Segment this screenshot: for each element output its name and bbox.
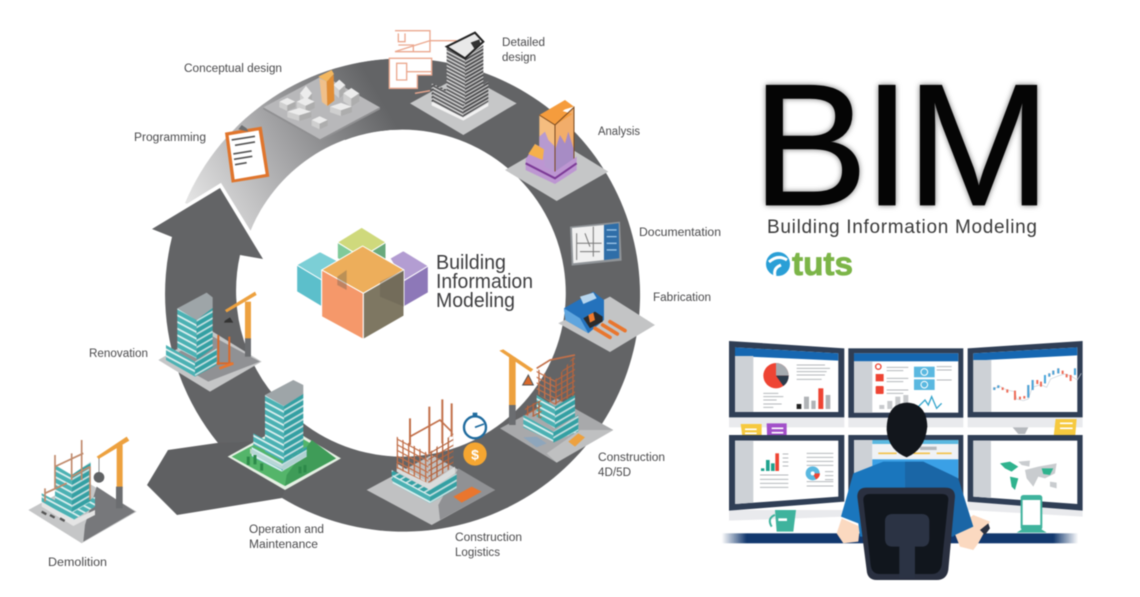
cube: teal: [297, 252, 345, 307]
ring: dark main arc: [282, 59, 640, 532]
monitor stand and sticky notes: [741, 419, 1077, 444]
logo: tuts: [766, 245, 853, 282]
monitor: world map: [968, 435, 1083, 517]
chair: [857, 488, 955, 580]
cube: green: [337, 227, 386, 273]
central logo text: Modeling: [436, 290, 515, 312]
icon: stopwatch: [464, 413, 486, 438]
icon: phone: [1017, 495, 1047, 533]
step labels: Renovation: [89, 348, 148, 360]
step: demolition: [28, 437, 137, 543]
process ring with arrows: [147, 58, 640, 532]
subtitle: Building Information Modeling: [767, 217, 1037, 238]
person: arms: [837, 515, 990, 550]
monitor: centre web page: [848, 435, 963, 502]
monitor: security dashboard: [848, 348, 963, 427]
step labels: [48, 37, 721, 569]
step labels: Fabrication: [653, 292, 711, 304]
title: BIM: BIM: [752, 47, 1051, 242]
icon: mouse: [980, 523, 990, 535]
central logo text: Building: [436, 252, 506, 274]
arrow: demolition branch: [147, 440, 300, 515]
step labels: 4D/5D: [598, 467, 631, 479]
step: construction 4D/5D: [499, 349, 613, 463]
step: conceptual design platform: [263, 70, 380, 141]
desk: [722, 533, 1078, 543]
step: analysis tower: [505, 100, 608, 201]
step labels: Conceptual design: [184, 63, 282, 75]
step labels: Detailed: [502, 37, 545, 49]
step labels: Operation and: [249, 524, 324, 536]
step labels: Logistics: [455, 547, 500, 559]
monitor: bar and donut report: [729, 435, 844, 521]
arrow: upward head into programming: [152, 188, 290, 498]
central logo: coloured cubes: [297, 227, 428, 339]
step labels: Demolition: [48, 557, 107, 569]
logo: tuts: tuts: [792, 245, 853, 282]
step: fabrication: [558, 292, 655, 352]
step: operation and maintenance: [228, 380, 341, 490]
white gap around arrow head: [150, 187, 265, 260]
person: torso: [841, 462, 905, 537]
central logo text: Information: [436, 271, 533, 293]
step labels: Construction: [598, 452, 665, 464]
step labels: Construction: [455, 532, 522, 544]
step: documentation sheet: [570, 222, 622, 266]
monitor: candlestick chart: [968, 341, 1083, 427]
step labels: Analysis: [598, 126, 640, 138]
step: renovation: [158, 292, 262, 392]
icon: tower crane: [499, 349, 533, 425]
icon: mug: [770, 510, 796, 532]
illustration: analyst at six monitors: [722, 341, 1083, 580]
central logo text: [436, 252, 533, 312]
step labels: Maintenance: [249, 539, 318, 551]
step: detailed design tower: [389, 31, 517, 135]
ring: light gradient start arc: [185, 58, 404, 232]
cube: orange foreground: [322, 246, 404, 339]
cube: purple: [390, 251, 428, 307]
step: programming clipboard: [225, 125, 269, 183]
step labels: Documentation: [639, 227, 721, 239]
monitor: pie chart dashboard: [729, 341, 844, 427]
icon: orange massing tower: [318, 70, 334, 106]
person: head: [887, 403, 927, 457]
icon: crane with wrecking ball: [94, 437, 129, 508]
icon: dollar coin: $: [471, 446, 479, 462]
icon: floor plan sheets: [389, 31, 457, 93]
step labels: Programming: [134, 132, 206, 144]
icon: renovation crane: [224, 292, 257, 357]
step labels: design: [502, 52, 536, 64]
step: construction logistics: [367, 399, 495, 525]
